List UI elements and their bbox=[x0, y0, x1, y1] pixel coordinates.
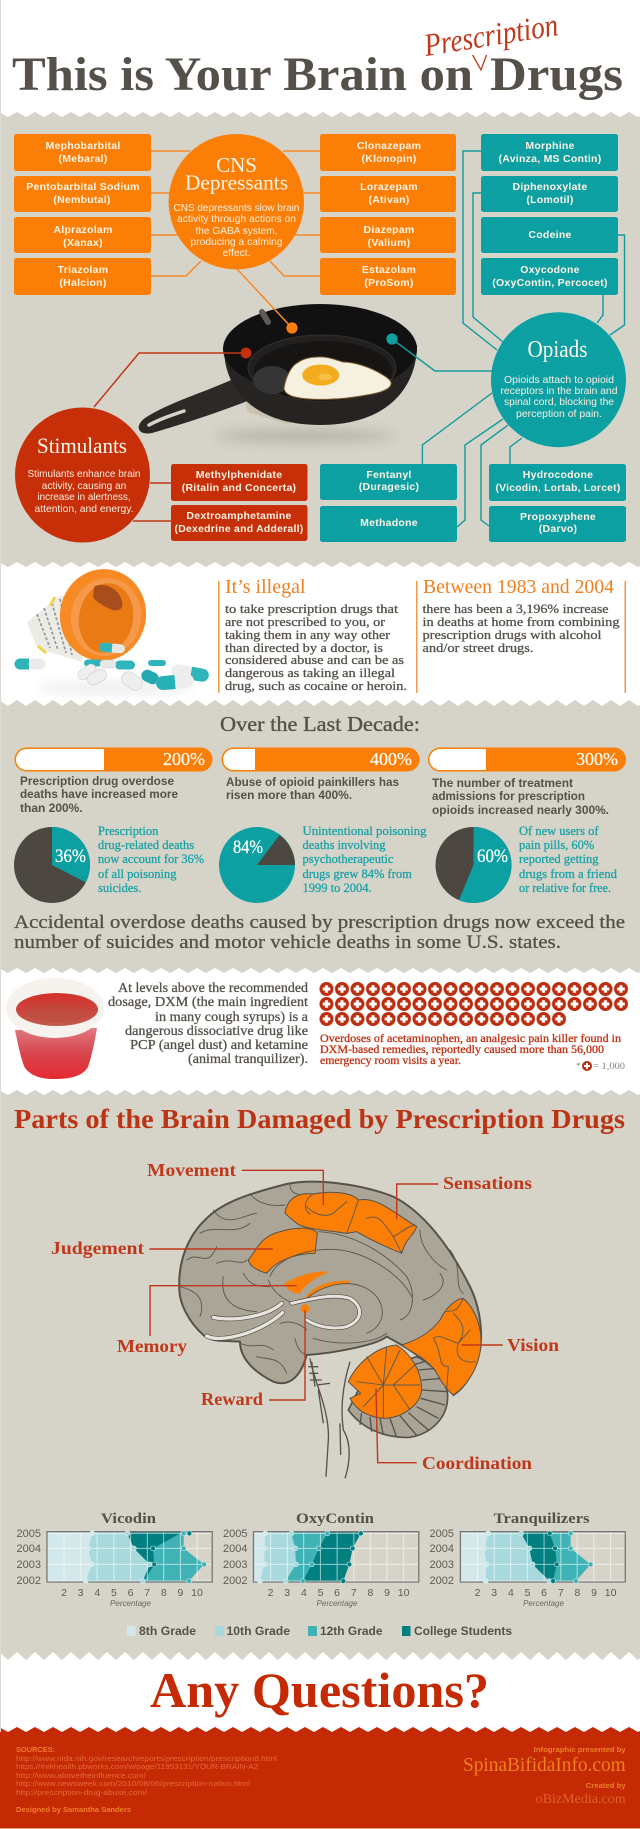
circle: Stimulants: attention, and energy. bbox=[34, 504, 134, 515]
region: Reward bbox=[301, 1304, 309, 1313]
label: Vision: Vision bbox=[507, 1335, 559, 1355]
label: Memory bbox=[117, 1286, 297, 1356]
line and marker: stimulants to pan bbox=[94, 348, 251, 407]
pie text: 60%: drugs from a friend bbox=[519, 867, 618, 881]
footer: credits: oBizMedia.com bbox=[536, 1792, 626, 1807]
circle: CNS Depressants: effect. bbox=[222, 248, 250, 259]
text block: DXM: in many cough syrups) is a bbox=[155, 1010, 309, 1025]
circle: Opiads: receptors in the brain and bbox=[500, 386, 618, 397]
box: Propoxyphene bbox=[489, 506, 626, 542]
box: Methadone: Methadone bbox=[360, 517, 418, 529]
area chart: Tranquilizers: 10 bbox=[605, 1587, 617, 1599]
footer: credits: SpinaBifidaInfo.com bbox=[463, 1754, 626, 1776]
area chart: Vicodin bbox=[17, 1511, 212, 1608]
box: Fentanyl: (Duragesic) bbox=[359, 481, 419, 493]
pie text: 60%: pain pills, 60% bbox=[519, 838, 594, 852]
area chart: Tranquilizers: Tranquilizers bbox=[494, 1511, 590, 1527]
white fibre tracts bbox=[207, 1296, 360, 1338]
region: Memory bbox=[284, 1271, 350, 1300]
area chart: Tranquilizers: 5 bbox=[525, 1587, 531, 1599]
footer: credits: Infographic presented by bbox=[534, 1745, 627, 1754]
illustration: spilled pill bottle bbox=[14, 562, 210, 693]
footer: sources: SOURCES: bbox=[16, 1745, 55, 1754]
text block: Between 1983 and 2004: there has been a 3,196% increase bbox=[422, 601, 609, 616]
pie text: 60% bbox=[519, 824, 618, 895]
area chart: OxyContin bbox=[223, 1511, 419, 1608]
area chart: OxyContin: 2 bbox=[268, 1587, 274, 1599]
box: Diazepam: Diazepam bbox=[363, 224, 415, 236]
caption: treatment admissions bbox=[432, 776, 609, 817]
box: Dextroamphetamine: Dextroamphetamine bbox=[186, 510, 292, 522]
box: Dextroamphetamine: (Dexedrine and Adderall) bbox=[174, 523, 304, 535]
pie text: 60%: or relative for free. bbox=[519, 881, 611, 895]
legend: one cross equals 1,000: * bbox=[576, 1061, 581, 1071]
box: Mephobarbital bbox=[14, 134, 151, 171]
area chart: Tranquilizers: 4 bbox=[508, 1587, 514, 1599]
area chart: Tranquilizers: 9 bbox=[591, 1587, 597, 1599]
area chart: OxyContin: 4 bbox=[301, 1587, 307, 1599]
area chart: Tranquilizers: 2 bbox=[475, 1587, 481, 1599]
area chart: OxyContin: 9 bbox=[384, 1587, 390, 1599]
box: Alprazolam bbox=[14, 217, 151, 253]
box: Propoxyphene: (Darvo) bbox=[539, 523, 577, 535]
area chart: Vicodin: Vicodin bbox=[101, 1511, 157, 1527]
text block: acetaminophen overdoses: DXM-based remedies, reportedly caused more than 56,000 bbox=[320, 1042, 604, 1056]
circle: Opiads: perception of pain. bbox=[516, 409, 602, 420]
text block: Between 1983 and 2004 bbox=[416, 576, 626, 693]
cerebrum bbox=[179, 1182, 481, 1395]
label: Sensations: Sensations bbox=[443, 1173, 532, 1193]
region: Movement and Sensations bbox=[285, 1192, 417, 1253]
box: Clonazepam bbox=[320, 134, 456, 171]
region: Vision bbox=[402, 1298, 481, 1395]
box: Mephobarbital: Mephobarbital bbox=[45, 140, 121, 152]
line and marker: CNS to pan bbox=[237, 269, 298, 334]
pie text: 84%: 1999 to 2004. bbox=[302, 881, 372, 895]
circle: Stimulants: Stimulants bbox=[37, 433, 127, 458]
label: Sensations bbox=[397, 1173, 532, 1219]
area chart: Tranquilizers: Percentage bbox=[523, 1599, 565, 1608]
chart legend: 10th Grade bbox=[226, 1624, 290, 1638]
pie text: 84%: Unintentional poisoning bbox=[302, 824, 427, 838]
footer: sources: http://prescription-drug-abuse.com/ bbox=[16, 1788, 148, 1797]
area chart: Vicodin: 2002 bbox=[17, 1575, 41, 1587]
caption: treatment admissions: opioids increased nearly 300%. bbox=[432, 803, 609, 817]
caption: overdose deaths: Prescription drug overdose bbox=[20, 774, 174, 788]
circle: Stimulants: Stimulants enhance brain bbox=[28, 469, 140, 480]
box: Diphenoxylate bbox=[481, 176, 618, 212]
box: Estazolam: Estazolam bbox=[362, 264, 416, 276]
pie text: 36%: suicides. bbox=[98, 881, 141, 895]
area chart: Tranquilizers: 3 bbox=[491, 1587, 497, 1599]
box: Lorazepam: Lorazepam bbox=[360, 181, 418, 193]
pie chart: 60% bbox=[436, 827, 512, 903]
capsules bbox=[14, 642, 210, 693]
box: Codeine: Codeine bbox=[528, 229, 572, 241]
box: Morphine: Morphine bbox=[525, 140, 575, 152]
box: Clonazepam: Clonazepam bbox=[357, 140, 421, 152]
circle: CNS Depressants: CNS bbox=[216, 153, 257, 177]
area chart: Vicodin: 5 bbox=[111, 1587, 117, 1599]
area chart: Vicodin: 2003 bbox=[17, 1559, 41, 1571]
connectors: opioids bbox=[422, 151, 624, 527]
label: Reward: Reward bbox=[201, 1389, 263, 1409]
footer: sources: http://www.nida.nih.gov/researchreports/prescription/prescription8.html bbox=[16, 1754, 277, 1763]
area chart: Vicodin: 2005 bbox=[17, 1528, 41, 1540]
cerebellum bbox=[348, 1345, 448, 1437]
box: Hydrocodone: Hydrocodone bbox=[523, 469, 593, 481]
box: Lorazepam: (Ativan) bbox=[368, 194, 410, 206]
pie text: 60%: Of new users of bbox=[519, 824, 599, 838]
footer: credits bbox=[463, 1745, 627, 1807]
area chart: Vicodin: 3 bbox=[78, 1587, 84, 1599]
pie chart: 36%: 36% bbox=[55, 846, 86, 867]
circle: CNS Depressants: Depressants bbox=[185, 170, 288, 194]
pie chart: 84% bbox=[219, 827, 295, 903]
circle: Opiads bbox=[491, 312, 626, 447]
label: Vision bbox=[462, 1335, 559, 1355]
text block: acetaminophen overdoses bbox=[320, 1031, 621, 1067]
label: Coordination bbox=[376, 1388, 532, 1473]
area chart: Vicodin: 8 bbox=[161, 1587, 167, 1599]
pictogram: 56 emergency visit crosses bbox=[319, 982, 629, 1026]
text block: DXM: dangerous dissociative drug like bbox=[125, 1024, 308, 1039]
pie text: 60%: reported getting bbox=[519, 852, 599, 866]
area chart: Tranquilizers: 8 bbox=[574, 1587, 580, 1599]
caption: overdose deaths bbox=[20, 774, 178, 815]
area chart: OxyContin: 2005 bbox=[223, 1528, 248, 1540]
box: Oxycodone: Oxycodone bbox=[520, 264, 580, 276]
title bbox=[12, 6, 623, 101]
legend: one cross equals 1,000 bbox=[576, 1061, 626, 1071]
line and marker: opioids to pan bbox=[386, 333, 492, 371]
pie chart: 84%: 84% bbox=[233, 837, 263, 858]
area chart: Tranquilizers bbox=[430, 1511, 626, 1608]
box: Triazolam bbox=[14, 258, 151, 295]
box: Codeine bbox=[481, 217, 618, 253]
area chart: OxyContin: 7 bbox=[351, 1587, 357, 1599]
text block: DXM bbox=[108, 981, 309, 1067]
pie text: 84%: deaths involving bbox=[302, 838, 386, 852]
progress bar: 200% bbox=[14, 748, 212, 772]
box: Triazolam: (Halcion) bbox=[59, 277, 107, 289]
circle: CNS Depressants bbox=[169, 134, 304, 269]
box: Morphine: (Avinza, MS Contin) bbox=[499, 153, 601, 165]
area chart: OxyContin: 8 bbox=[367, 1587, 373, 1599]
text block: It's illegal: than directed by a doctor, is bbox=[225, 640, 383, 655]
caption: overdose deaths: deaths have increased more bbox=[20, 787, 178, 801]
text block: It's illegal bbox=[218, 576, 407, 693]
text block: Between 1983 and 2004: in deaths at home from combining bbox=[422, 614, 620, 629]
circle: Opiads: Opioids attach to opioid bbox=[504, 375, 614, 386]
progress bar: 400% bbox=[222, 748, 420, 772]
area chart: Vicodin: 9 bbox=[177, 1587, 183, 1599]
chart legend: 12th Grade bbox=[320, 1624, 383, 1638]
box: Estazolam bbox=[320, 258, 456, 295]
area chart: OxyContin: 5 bbox=[318, 1587, 324, 1599]
footer: sources: Designed by Samantha Sanders bbox=[16, 1805, 131, 1814]
text block: It's illegal: to take prescription drugs that bbox=[225, 601, 398, 616]
circle: CNS Depressants: producing a calming bbox=[190, 237, 283, 248]
box: Pentobarbital Sodium: (Nembutal) bbox=[53, 194, 111, 206]
footer: sources: http://www.newsweek.com/2010/08/06/prescription-nation.html bbox=[16, 1779, 250, 1788]
statement: accidental overdose: number of suicides and motor vehicle deaths in some U.S. states. bbox=[14, 933, 561, 953]
progress bar: 200%: 200% bbox=[163, 749, 205, 769]
text block: DXM: PCP (angel dust) and ketamine bbox=[130, 1038, 308, 1053]
circle: CNS Depressants: activity through actions on bbox=[177, 214, 296, 225]
box: Dextroamphetamine bbox=[171, 505, 308, 541]
pie text: 84% bbox=[302, 824, 427, 895]
text block: It's illegal: taking them in any way other bbox=[225, 627, 391, 642]
brain folds bbox=[180, 1185, 475, 1390]
label: Coordination: Coordination bbox=[422, 1453, 532, 1473]
label: Memory: Memory bbox=[117, 1336, 187, 1356]
text block: DXM: dosage, DXM (the main ingredient bbox=[108, 995, 308, 1010]
text block: acetaminophen overdoses: emergency room visits a year. bbox=[320, 1053, 461, 1067]
progress bar: 300% bbox=[428, 748, 626, 772]
footer: sources bbox=[16, 1745, 277, 1814]
area chart: Tranquilizers: 6 bbox=[541, 1587, 547, 1599]
caption: overdose deaths: than 200%. bbox=[20, 801, 83, 815]
circle: CNS Depressants: the GABA system, bbox=[196, 226, 278, 237]
progress bar: 400%: 400% bbox=[370, 749, 412, 769]
caret mark bbox=[473, 55, 486, 70]
caption: opioid painkillers bbox=[226, 775, 399, 802]
circle: Opiads: Opiads bbox=[528, 337, 588, 363]
caption: opioid painkillers: Abuse of opioid painkillers has bbox=[226, 775, 399, 789]
box: Morphine bbox=[481, 134, 618, 171]
area chart: Vicodin: 10 bbox=[191, 1587, 203, 1599]
area chart: OxyContin: 2002 bbox=[223, 1575, 248, 1587]
box: Methadone bbox=[320, 506, 457, 542]
illustration: cup of cough syrup bbox=[6, 978, 104, 1079]
area chart: Vicodin: 2 bbox=[61, 1587, 67, 1599]
panel: drug types diagram bbox=[14, 134, 626, 542]
title: Drugs bbox=[490, 48, 623, 101]
box: Mephobarbital: (Mebaral) bbox=[59, 153, 107, 165]
statement: accidental overdose: Accidental overdose deaths caused by prescription drugs now exceed the bbox=[14, 913, 625, 933]
area chart: Tranquilizers: 2005 bbox=[430, 1528, 454, 1540]
box: Fentanyl: Fentanyl bbox=[366, 469, 412, 481]
pie text: 84%: drugs grew 84% from bbox=[302, 867, 412, 881]
caption: opioid painkillers: risen more than 400%. bbox=[226, 788, 352, 802]
area chart: Vicodin: 4 bbox=[94, 1587, 100, 1599]
connector: stimulants boxes bbox=[133, 483, 171, 521]
box: Triazolam: Triazolam bbox=[58, 264, 108, 276]
diagram: brain bbox=[179, 1182, 481, 1478]
footer: credits: Created by bbox=[586, 1781, 627, 1790]
box: Estazolam: (ProSom) bbox=[364, 277, 414, 289]
box: Alprazolam: Alprazolam bbox=[53, 224, 113, 236]
area chart: Tranquilizers: 2004 bbox=[430, 1543, 454, 1555]
circle: Stimulants: activity, causing an bbox=[42, 481, 126, 492]
brain stem bbox=[308, 1358, 350, 1478]
area chart: Vicodin: 6 bbox=[128, 1587, 134, 1599]
pie text: 36%: now account for 36% bbox=[98, 852, 204, 866]
box: Diphenoxylate: Diphenoxylate bbox=[512, 181, 588, 193]
circle: CNS Depressants: CNS depressants slow brain bbox=[174, 203, 300, 214]
pie chart: 36% bbox=[14, 827, 90, 903]
circle: Stimulants bbox=[15, 408, 150, 542]
area chart: OxyContin: OxyContin bbox=[296, 1511, 375, 1527]
box: Methylphenidate bbox=[171, 464, 308, 501]
box: Clonazepam: (Klonopin) bbox=[362, 153, 416, 165]
area chart: OxyContin: 3 bbox=[284, 1587, 290, 1599]
area chart: Vicodin: 7 bbox=[144, 1587, 150, 1599]
area chart: Tranquilizers: 7 bbox=[558, 1587, 564, 1599]
box: Methylphenidate: (Ritalin and Concerta) bbox=[182, 482, 296, 494]
footer: sources: http://www.abovetheinfluence.com/ bbox=[16, 1771, 147, 1780]
area chart: OxyContin: 6 bbox=[334, 1587, 340, 1599]
text block: It's illegal: It’s illegal bbox=[225, 576, 306, 598]
pie text: 36%: of all poisoning bbox=[98, 867, 177, 881]
area chart: OxyContin: Percentage bbox=[317, 1599, 358, 1608]
title: This is Your Brain on bbox=[12, 48, 473, 101]
area chart: Vicodin: Percentage bbox=[110, 1599, 152, 1608]
area chart: Tranquilizers: 2003 bbox=[430, 1559, 454, 1571]
pie text: 36%: drug-related deaths bbox=[98, 838, 194, 852]
text block: DXM: At levels above the recommended bbox=[118, 981, 308, 996]
heading: Any Questions?: Any Questions? bbox=[150, 1662, 489, 1718]
pie text: 84%: psychotherapeutic bbox=[302, 852, 394, 866]
area chart: OxyContin: 10 bbox=[398, 1587, 410, 1599]
handwritten insertion: Prescription: Prescription bbox=[421, 6, 560, 63]
area chart: OxyContin: 2003 bbox=[223, 1559, 248, 1571]
label: Reward bbox=[201, 1310, 305, 1409]
box: Alprazolam: (Xanax) bbox=[63, 237, 103, 249]
box: Diphenoxylate: (Lomotil) bbox=[526, 194, 574, 206]
pie chart: 60%: 60% bbox=[477, 846, 508, 867]
text block: It's illegal: are not prescribed to you, or bbox=[225, 614, 386, 629]
box: Hydrocodone: (Vicodin, Lortab, Lorcet) bbox=[496, 482, 620, 494]
label: Movement bbox=[147, 1160, 323, 1205]
box: Oxycodone bbox=[481, 258, 618, 295]
statement: accidental overdose bbox=[14, 913, 625, 953]
text block: Between 1983 and 2004: and/or street drugs. bbox=[422, 640, 534, 655]
photo: frying pan with egg bbox=[139, 304, 417, 442]
box: Diazepam bbox=[320, 217, 456, 253]
circle: Opiads: spinal cord, blocking the bbox=[504, 397, 614, 408]
progress bar: 300%: 300% bbox=[576, 749, 618, 769]
area chart: OxyContin: 2004 bbox=[223, 1543, 248, 1555]
area chart: Tranquilizers: 2002 bbox=[430, 1575, 454, 1587]
connectors: CNS depressants bbox=[151, 151, 320, 276]
text block: DXM: (animal tranquilizer). bbox=[188, 1052, 308, 1067]
caption: treatment admissions: admissions for prescription bbox=[432, 789, 585, 803]
area chart: Vicodin: 2004 bbox=[17, 1543, 41, 1555]
box: Hydrocodone bbox=[489, 464, 626, 501]
caption: treatment admissions: The number of treatment bbox=[432, 776, 573, 790]
box: Methylphenidate: Methylphenidate bbox=[196, 469, 282, 481]
box: Oxycodone: (OxyContin, Percocet) bbox=[492, 277, 608, 289]
region: Judgement bbox=[248, 1228, 317, 1273]
footer: sources: https://mrkhealth.pbworks.com/w/page/11953131/YOUR-BRAIN-A2 bbox=[16, 1762, 258, 1771]
box: Fentanyl bbox=[320, 464, 457, 500]
pie text: 36% bbox=[98, 824, 204, 895]
box: Pentobarbital Sodium: Pentobarbital Sodium bbox=[26, 181, 140, 193]
box: Lorazepam bbox=[320, 176, 456, 212]
text block: Between 1983 and 2004: Between 1983 and 2004 bbox=[423, 576, 614, 598]
text block: acetaminophen overdoses: Overdoses of acetaminophen, an analgesic pain killer found in bbox=[320, 1031, 621, 1045]
pie text: 36%: Prescription bbox=[98, 824, 159, 838]
chart legend bbox=[127, 1624, 512, 1638]
chart legend: College Students bbox=[414, 1624, 512, 1638]
chart legend: 8th Grade bbox=[139, 1624, 196, 1638]
heading: Over the Last Decade: Over the Last Decade: bbox=[220, 712, 420, 736]
box: Diazepam: (Valium) bbox=[368, 237, 410, 249]
text block: Between 1983 and 2004: prescription drugs with alcohol bbox=[422, 627, 602, 642]
text block: It's illegal: drug, such as cocaine or heroin. bbox=[225, 678, 407, 693]
legend: one cross equals 1,000: = 1,000 bbox=[593, 1061, 626, 1071]
box: Propoxyphene: Propoxyphene bbox=[520, 511, 596, 523]
box: Pentobarbital Sodium bbox=[14, 176, 151, 212]
circle: Stimulants: increase in alertness, bbox=[38, 492, 130, 503]
text block: It's illegal: dangerous as taking an illegal bbox=[225, 665, 395, 680]
label: Movement: Movement bbox=[147, 1160, 236, 1180]
heading: Parts of the Brain: Parts of the Brain Damaged by Prescription Drugs bbox=[14, 1104, 625, 1134]
label: Judgement: Judgement bbox=[51, 1238, 144, 1258]
text block: It's illegal: considered abuse and can be as bbox=[225, 652, 404, 667]
